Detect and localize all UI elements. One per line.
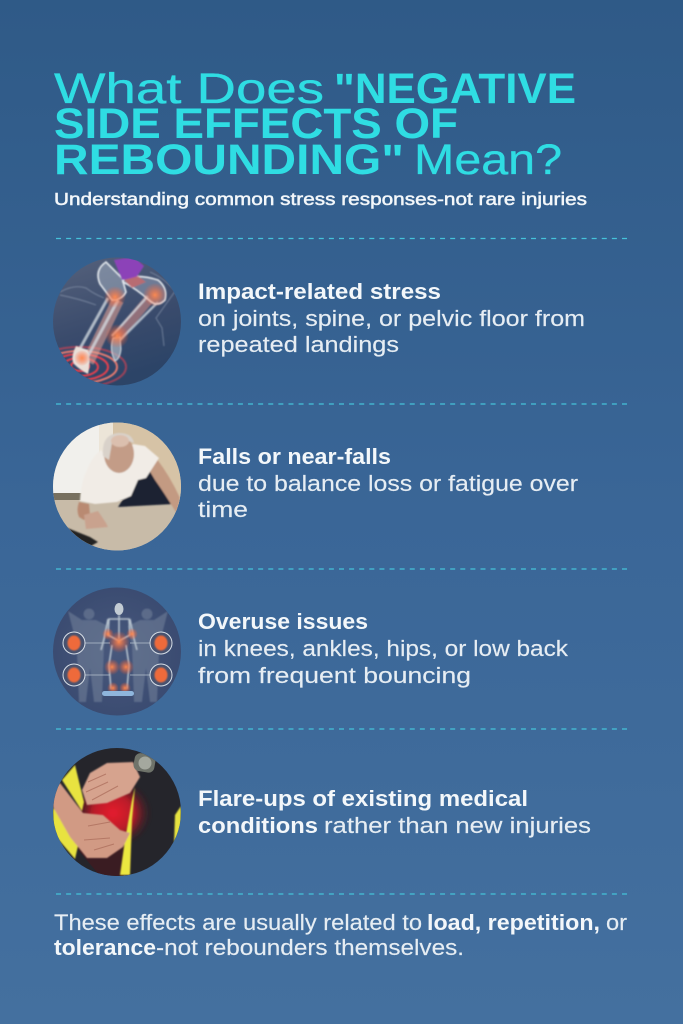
icon: legs landing with impact rings — [53, 258, 181, 386]
footer note: -not rebounders themselves. — [156, 935, 464, 960]
title: REBOUNDING" — [54, 136, 404, 184]
description — [198, 306, 585, 357]
heading: Impact-related stress — [198, 279, 441, 304]
icon: man fallen on floor — [53, 422, 183, 552]
panel: falls or near-falls — [53, 422, 578, 552]
description: on joints, spine, or pelvic floor from — [198, 306, 585, 331]
description: due to balance loss or fatigue over — [198, 471, 578, 496]
panel: flare-ups — [53, 748, 591, 876]
description — [198, 636, 569, 688]
title: Mean? — [414, 136, 562, 184]
icon: skeleton with inflamed joints — [53, 587, 181, 717]
description: time — [198, 497, 248, 522]
title: What Does — [54, 65, 324, 113]
heading and description: rather than new injuries — [324, 813, 591, 838]
description: repeated landings — [198, 332, 399, 357]
heading and description: Flare-ups of existing medical — [198, 786, 528, 811]
panel: overuse issues — [53, 587, 569, 717]
footer note: load, repetition, — [427, 910, 600, 935]
heading: Falls or near-falls — [198, 444, 391, 469]
title: "NEGATIVE — [334, 65, 576, 113]
title — [54, 65, 576, 184]
heading and description: conditions — [198, 813, 318, 838]
heading: Overuse issues — [198, 609, 368, 634]
description: from frequent bouncing — [198, 663, 471, 688]
footer note: tolerance — [54, 935, 156, 960]
footer note: or — [606, 910, 627, 935]
heading and description — [198, 786, 591, 838]
footer note — [54, 910, 627, 960]
title: SIDE EFFECTS OF — [54, 100, 458, 148]
description — [198, 471, 578, 522]
icon: hands holding a red glowing knee — [53, 748, 181, 876]
description: in knees, ankles, hips, or low back — [198, 636, 569, 661]
subtitle: Understanding common stress responses-not rare injuries — [54, 189, 587, 209]
panel: impact-related stress — [34, 257, 585, 387]
footer note: These effects are usually related to — [54, 910, 422, 935]
